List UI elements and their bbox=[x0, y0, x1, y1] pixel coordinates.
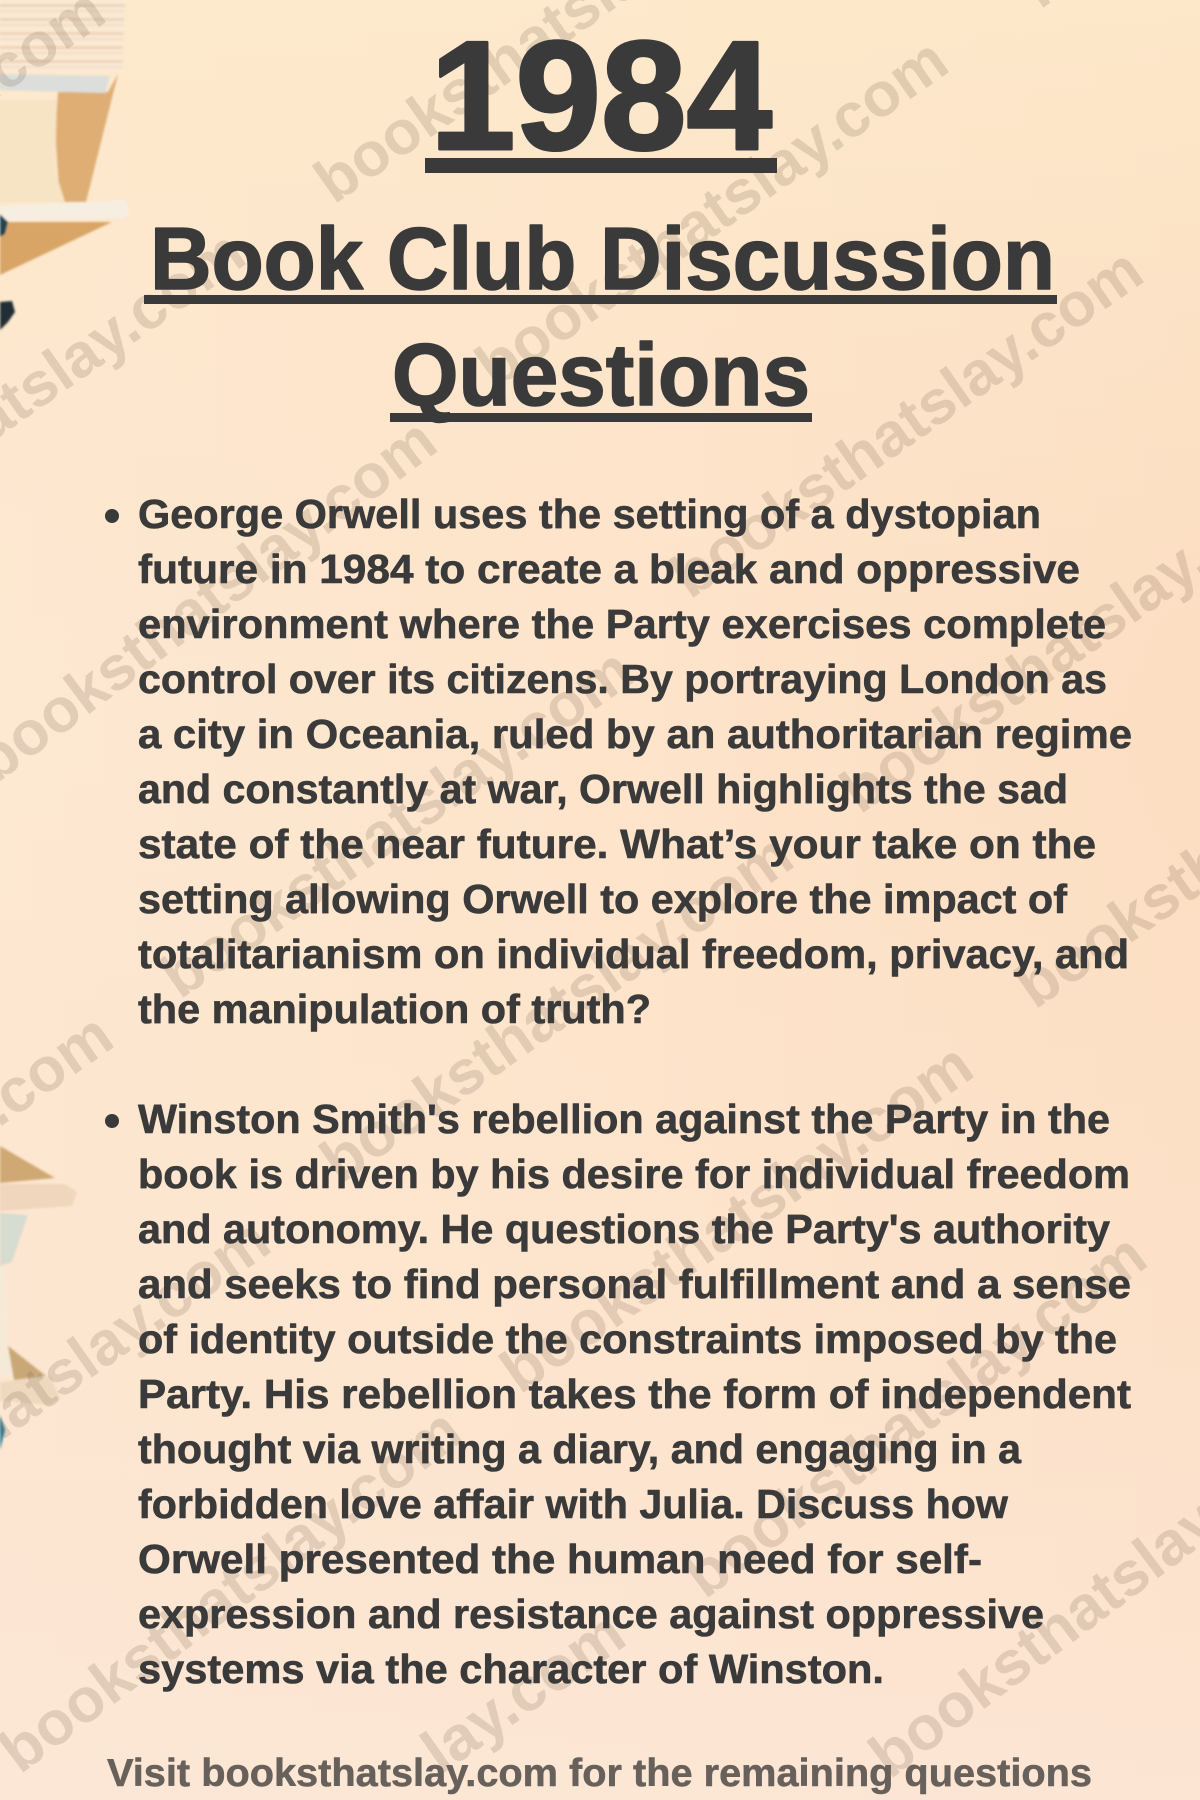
text block: question 2: expression and resistance against oppressive bbox=[138, 1591, 1044, 1637]
text block: question 2: systems via the character of Winston. bbox=[138, 1646, 884, 1692]
text block: question 1: environment where the Party exercises complete bbox=[138, 601, 1106, 647]
watermarks: booksthatslay.com bbox=[148, 635, 645, 1011]
heading: Book Club Discussion: Book Club Discussion bbox=[150, 209, 1055, 308]
text block: question 1: the manipulation of truth? bbox=[138, 986, 651, 1032]
text block: question 1: setting allowing Orwell to explore the impact of bbox=[138, 876, 1067, 922]
text block: question 2: and seeks to find personal fulfillment and a sense bbox=[138, 1261, 1131, 1307]
text block: question 1: future in 1984 to create a bleak and oppressive bbox=[138, 546, 1080, 592]
text block: question 2: of identity outside the constraints imposed by the bbox=[138, 1316, 1117, 1362]
title: 1984: 1984 bbox=[430, 9, 772, 182]
heading: Questions: Questions bbox=[392, 325, 810, 424]
watermarks: booksthatslay.com bbox=[488, 1030, 985, 1406]
footer text: Visit booksthatslay.com for the remaining questions bbox=[107, 1752, 1092, 1795]
text block: question 1: a city in Oceania, ruled by an authoritarian regime bbox=[138, 711, 1132, 757]
text block: question 1 bbox=[105, 491, 1132, 1032]
text block: question 2: Orwell presented the human need for self- bbox=[138, 1536, 982, 1582]
watermarks: booksthatslay.com bbox=[308, 820, 805, 1196]
watermarks: booksthatslay.com bbox=[658, 235, 1155, 611]
text block: question 2: thought via writing a diary, and engaging in a bbox=[138, 1426, 1022, 1472]
text block: question 2: book is driven by his desire for individual freedom bbox=[138, 1151, 1130, 1197]
watermarks: booksthatslay.com bbox=[0, 1395, 474, 1786]
text block: question 2: forbidden love affair with Julia. Discuss how bbox=[138, 1481, 1008, 1527]
text block: question 2: Party. His rebellion takes the form of independent bbox=[138, 1371, 1131, 1417]
text block: question 2: Winston Smith's rebellion against the Party in the bbox=[138, 1096, 1110, 1142]
text block: question 2: and autonomy. He questions the Party's authority bbox=[138, 1206, 1110, 1252]
watermarks: booksthatslay.com bbox=[672, 1220, 1159, 1611]
text block: question 1: state of the near future. What’s your take on the bbox=[138, 821, 1096, 867]
text block: question 1: and constantly at war, Orwell highlights the sad bbox=[138, 766, 1068, 812]
icon: top book stack bbox=[0, 0, 130, 330]
text block: question 1: control over its citizens. By portraying London as bbox=[138, 656, 1107, 702]
text block: question 2 bbox=[105, 1096, 1131, 1692]
watermarks: booksthatslay.com bbox=[463, 25, 960, 401]
icon: lower book stack bbox=[0, 1146, 77, 1450]
watermarks: lay.com bbox=[409, 1598, 637, 1786]
text block: question 1: totalitarianism on individual freedom, privacy, and bbox=[138, 931, 1129, 977]
text block: question 1: George Orwell uses the setting of a dystopian bbox=[138, 491, 1041, 537]
